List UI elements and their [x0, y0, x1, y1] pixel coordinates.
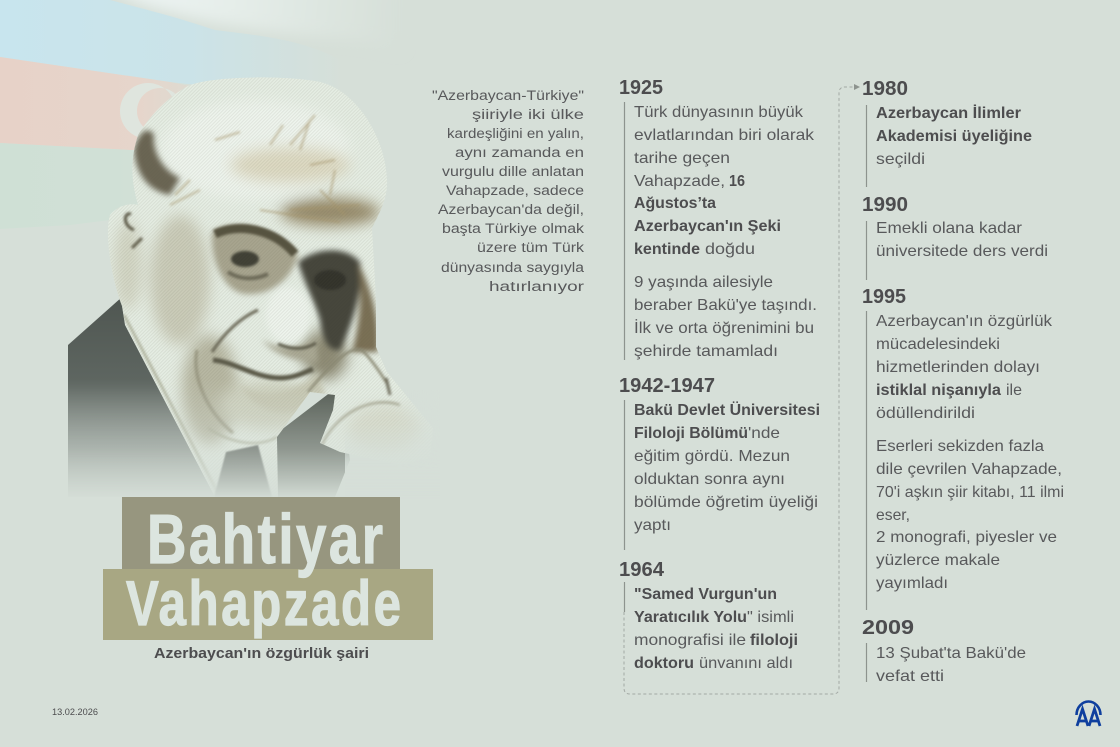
timeline 1925: Vahapzade,	[634, 173, 725, 190]
portrait: jacket right	[277, 394, 350, 494]
quote text block: aynı zamanda en	[455, 145, 584, 160]
timeline 1925: evlatlarından biri olarak	[634, 127, 815, 144]
portrait: nose highlight	[266, 287, 310, 343]
portrait: shirt collar edge	[124, 314, 212, 483]
timeline 1995: yayımladı	[876, 575, 948, 592]
timeline 1925: Ağustos’ta	[634, 195, 716, 212]
timeline 1995: eser,	[876, 507, 910, 524]
timeline 1990	[862, 194, 1048, 280]
timeline 1964: Yaratıcılık Yolu	[634, 609, 747, 626]
timeline 1990: 1990	[862, 194, 908, 216]
portrait: hair	[134, 130, 180, 195]
timeline 1925: tarihe geçen	[634, 150, 730, 167]
timeline 1995: ile	[1006, 382, 1022, 399]
timeline 1925: Azerbaycan'ın Şeki	[634, 218, 781, 235]
portrait: jacket left	[68, 299, 209, 486]
portrait: head and hand	[108, 78, 416, 495]
quote text block: dünyasında saygıyla	[441, 260, 585, 275]
quote text block: "Azerbaycan-Türkiye"	[432, 88, 584, 103]
quote text block: üzere tüm Türk	[477, 240, 584, 255]
timeline 1964: ünvanını aldı	[699, 655, 793, 672]
portrait: mouth	[213, 360, 313, 378]
timeline 1964: monografisi ile	[634, 632, 746, 649]
timeline 1995: 70'i aşkın şiir kitabı, 11 ilmi	[876, 484, 1064, 501]
timeline 1980: 1980	[862, 78, 908, 100]
timeline 1995: ödüllendirildi	[876, 405, 975, 422]
portrait: tie	[214, 445, 272, 497]
quote text block: Azerbaycan'da değil,	[438, 202, 584, 217]
timeline 2009	[862, 617, 1026, 685]
quote text block: hatırlanıyor	[489, 279, 585, 294]
timeline 1995: hizmetlerinden dolayı	[876, 359, 1040, 376]
timeline 1925: kentinde	[634, 241, 700, 258]
name block: Vahapzade: Vahapzade	[126, 568, 401, 638]
name block: Bahtiyar: Bahtiyar	[147, 501, 383, 579]
timeline 1964	[619, 559, 798, 672]
quote text block: şiiriyle iki ülke	[472, 107, 584, 122]
subtitle: Azerbaycan'ın özgürlük şairi	[154, 645, 369, 662]
portrait: hand fade	[345, 453, 350, 472]
timeline 1942-1947: Bakü Devlet Üniversitesi	[634, 400, 820, 419]
flag background	[0, 0, 400, 229]
portrait: fingers on temple	[352, 262, 378, 352]
quote text block: vurgulu dille anlatan	[442, 164, 584, 179]
timeline 1925	[619, 77, 817, 360]
quote text block: Vahapzade, sadece	[446, 183, 584, 198]
quote text block	[432, 88, 585, 294]
portrait: right eye socket	[298, 250, 361, 350]
timeline 1995: 1995	[862, 286, 906, 308]
timeline 1964: "Samed Vurgun'un	[634, 586, 777, 603]
timeline 2009: 13 Şubat'ta Bakü'de	[876, 645, 1026, 662]
timeline 1995: istiklal nişanıyla	[876, 382, 1001, 399]
portrait	[68, 70, 440, 500]
timeline 1942-1947: 'nde	[748, 425, 780, 442]
timeline 1995: Eserleri sekizden fazla	[876, 438, 1044, 455]
dashed connector arrow	[624, 84, 860, 694]
timeline 1942-1947	[619, 375, 820, 550]
timeline 1942-1947: Filoloji Bölümü	[634, 425, 748, 442]
timeline 1980: Azerbaycan İlimler	[876, 104, 1021, 122]
timeline 1964: " isimli	[747, 609, 794, 626]
timeline 1980: Akademisi üyeliğine	[876, 128, 1032, 145]
date: 13.02.2026	[52, 707, 98, 717]
quote text block: kardeşliğini en yalın,	[447, 126, 584, 141]
icon: AA logo	[1076, 702, 1100, 726]
timeline 1925: doğdu	[705, 241, 755, 258]
timeline 1990: Emekli olana kadar	[876, 220, 1023, 237]
timeline 1995: 2 monografi, piyesler ve	[876, 529, 1057, 546]
timeline 1942-1947: eğitim gördü. Mezun	[634, 448, 790, 465]
portrait: chin shadow	[248, 373, 326, 410]
timeline 1942-1947: olduktan sonra aynı	[634, 471, 785, 488]
timeline 2009: 2009	[862, 617, 914, 639]
timeline 1995: yüzlerce makale	[876, 552, 1000, 569]
timeline 1925: Türk dünyasının büyük	[634, 104, 804, 121]
portrait: left eye socket	[212, 225, 298, 294]
timeline 1964: 1964	[619, 559, 665, 581]
timeline 1995: dile çevrilen Vahapzade,	[876, 461, 1062, 478]
timeline 1942-1947: bölümde öğretim üyeliği	[634, 494, 818, 511]
timeline 1925: 1925	[619, 77, 663, 99]
timeline 1964: filoloji	[750, 632, 798, 649]
timeline 1925: 9 yaşında ailesiyle	[634, 274, 773, 291]
timeline 1980	[862, 78, 1032, 187]
icon: crescent	[120, 83, 183, 139]
timeline 1995: mücadelesindeki	[876, 336, 1000, 353]
timeline 1925: beraber Bakü'ye taşındı.	[634, 297, 817, 314]
timeline 1990: üniversitede ders verdi	[876, 243, 1048, 260]
timeline 1964: doktoru	[634, 655, 694, 672]
timeline 1942-1947: yaptı	[634, 517, 671, 534]
timeline 1942-1947: 1942-1947	[619, 375, 715, 397]
timeline 1995	[862, 286, 1064, 610]
timeline 1925: İlk ve orta öğrenimini bu	[634, 318, 814, 337]
timeline 1925: şehirde tamamladı	[634, 343, 778, 360]
quote text block: başta Türkiye olmak	[442, 221, 584, 236]
timeline 1995: Azerbaycan'ın özgürlük	[876, 313, 1053, 330]
timeline 2009: vefat etti	[876, 668, 944, 685]
timeline 1925: 16	[729, 173, 745, 190]
timeline 1980: seçildi	[876, 151, 925, 168]
